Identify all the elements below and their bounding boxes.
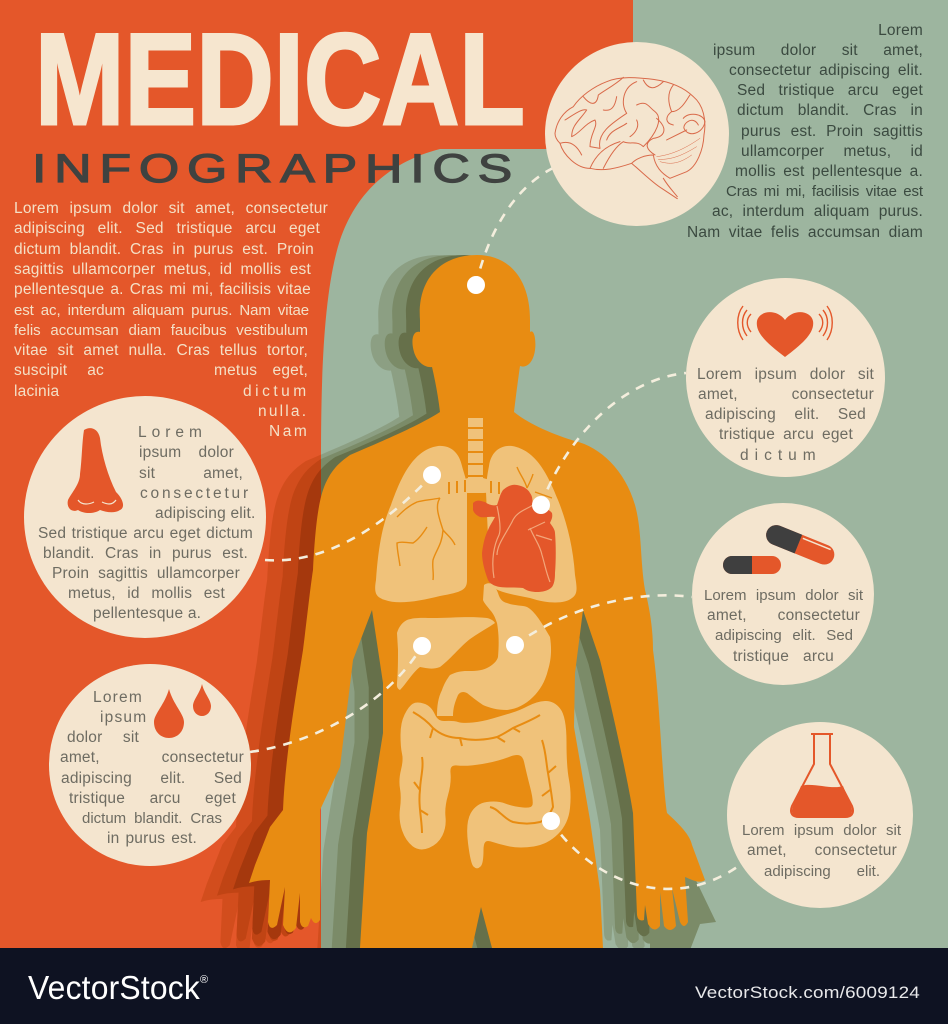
text: heart: dictum [740, 447, 822, 464]
text block: intro top right [687, 22, 923, 241]
icon: flask [790, 733, 854, 818]
text block: intro top right: consectetur adipiscing elit. [729, 62, 923, 79]
panel: blood [49, 664, 251, 866]
dashed connectors [250, 168, 740, 889]
text block: intro left: metus eget, [214, 362, 308, 379]
footer registered mark: ® [200, 974, 208, 986]
text: nose [38, 424, 256, 622]
text: heart: tristique arcu eget [719, 426, 853, 443]
text block: intro top right: dictum blandit. Cras in [737, 102, 923, 119]
text block: intro top right: ipsum dolor sit amet, [713, 42, 923, 59]
heart [473, 485, 556, 592]
colon veins [413, 712, 556, 833]
text block: intro top right: purus est. Proin sagittis [741, 123, 923, 140]
text: pills: amet, consectetur [707, 607, 860, 624]
text block: intro left [14, 200, 328, 440]
text block: intro left: adipiscing elit. Sed tristique arcu eget [14, 220, 320, 237]
trachea [440, 418, 510, 496]
text: blood: ipsum [100, 709, 147, 726]
footer bar [0, 948, 948, 1024]
text block: intro top right: Nam vitae felis accumsan diam [687, 224, 923, 241]
body shadow on green [321, 255, 716, 948]
text: blood: amet, consectetur [60, 749, 244, 766]
text: flask: Lorem ipsum dolor sit [742, 822, 901, 839]
lungs [375, 446, 577, 602]
text block: intro top right: Cras mi mi, facilisis vitae est [726, 183, 923, 200]
text: heart: adipiscing elit. Sed [705, 406, 866, 423]
background: green panel [321, 0, 948, 948]
text block: intro left: lacinia [14, 383, 59, 400]
text: pills: adipiscing elit. Sed [715, 627, 853, 644]
text: flask [742, 822, 901, 880]
subtitle: INFOGRAPHICS [32, 147, 520, 191]
panel: nose [24, 396, 266, 638]
text: pills: tristique arcu [733, 648, 834, 665]
text: blood: dictum blandit. Cras [82, 810, 222, 827]
body shadow on orange [200, 454, 321, 948]
text block: intro top right: ullamcorper metus, id [741, 143, 923, 160]
text: nose: metus, id mollis est [68, 585, 225, 602]
panel: heart [686, 278, 885, 477]
icon: blood drops [154, 684, 211, 738]
text block: intro left: nulla. [258, 403, 308, 420]
liver [397, 617, 495, 690]
footer logo: VectorStock [28, 969, 200, 1006]
text: blood: adipiscing elit. Sed [61, 770, 242, 787]
text: nose: ipsum dolor [139, 444, 234, 461]
text block: intro left: dictum [243, 383, 310, 400]
icon: pills [723, 525, 834, 574]
bronchial tree [397, 467, 552, 580]
text block: intro top right: Sed tristique arcu eget [737, 82, 923, 99]
connector dots [413, 276, 560, 830]
text block: intro left: vitae sit amet nulla. Cras tellus tortor, [14, 342, 308, 359]
text block: intro left: sagittis ullamcorper metus, id mollis est [14, 261, 311, 278]
human body silhouette [249, 255, 705, 948]
text block: intro left: pellentesque a. Cras mi mi, facilisis vitae [14, 281, 311, 298]
title: MEDICAL [35, 6, 525, 152]
text: heart: Lorem ipsum dolor sit [697, 366, 874, 383]
panel: flask [727, 722, 913, 908]
text block: intro left: felis accumsan diam faucibus vestibulum [14, 322, 308, 339]
text: heart: amet, consectetur [698, 386, 874, 403]
text: pills [704, 587, 863, 665]
text block: intro left: suscipit ac [14, 362, 104, 379]
text: nose: Lorem [138, 424, 207, 441]
text block: intro left: Lorem ipsum dolor sit amet, consectetur [14, 200, 328, 217]
organs [375, 418, 577, 867]
text block: intro top right: mollis est pellentesque a. [735, 163, 923, 180]
text: nose: blandit. Cras in purus est. [43, 545, 248, 562]
text: flask: adipiscing elit. [764, 863, 880, 880]
text: nose: pellentesque a. [93, 605, 201, 622]
text: blood: Lorem [93, 689, 143, 706]
colon [401, 702, 569, 867]
text: pills: Lorem ipsum dolor sit [704, 587, 863, 604]
text: nose: Sed tristique arcu eget dictum [38, 525, 253, 542]
text: nose: consectetur [140, 485, 251, 502]
text: blood [60, 689, 244, 847]
text: blood: in purus est. [107, 830, 197, 847]
text block: intro left: est ac, interdum aliquam purus. Nam vitae [14, 302, 309, 319]
text: flask: amet, consectetur [747, 842, 897, 859]
text block: intro left: dictum blandit. Cras in purus est. Proin [14, 241, 314, 258]
text block: intro left: Nam [269, 423, 309, 440]
text: blood: tristique arcu eget [69, 790, 236, 807]
text: nose: sit amet, [139, 465, 243, 482]
icon: heart with pulse arcs [737, 306, 833, 357]
icon: brain [554, 76, 706, 200]
text: nose: adipiscing elit. [155, 505, 256, 522]
text: blood: dolor sit [67, 729, 139, 746]
footer url: VectorStock.com/6009124 [695, 983, 920, 1002]
stomach [437, 583, 551, 716]
panel: brain [545, 42, 729, 226]
text block: intro top right: ac, interdum aliquam purus. [712, 203, 923, 220]
text: nose: Proin sagittis ullamcorper [52, 565, 240, 582]
text block: intro top right: Lorem [878, 22, 923, 39]
text: heart [697, 366, 874, 464]
icon: nose [68, 428, 124, 513]
panel: pills [692, 503, 874, 685]
